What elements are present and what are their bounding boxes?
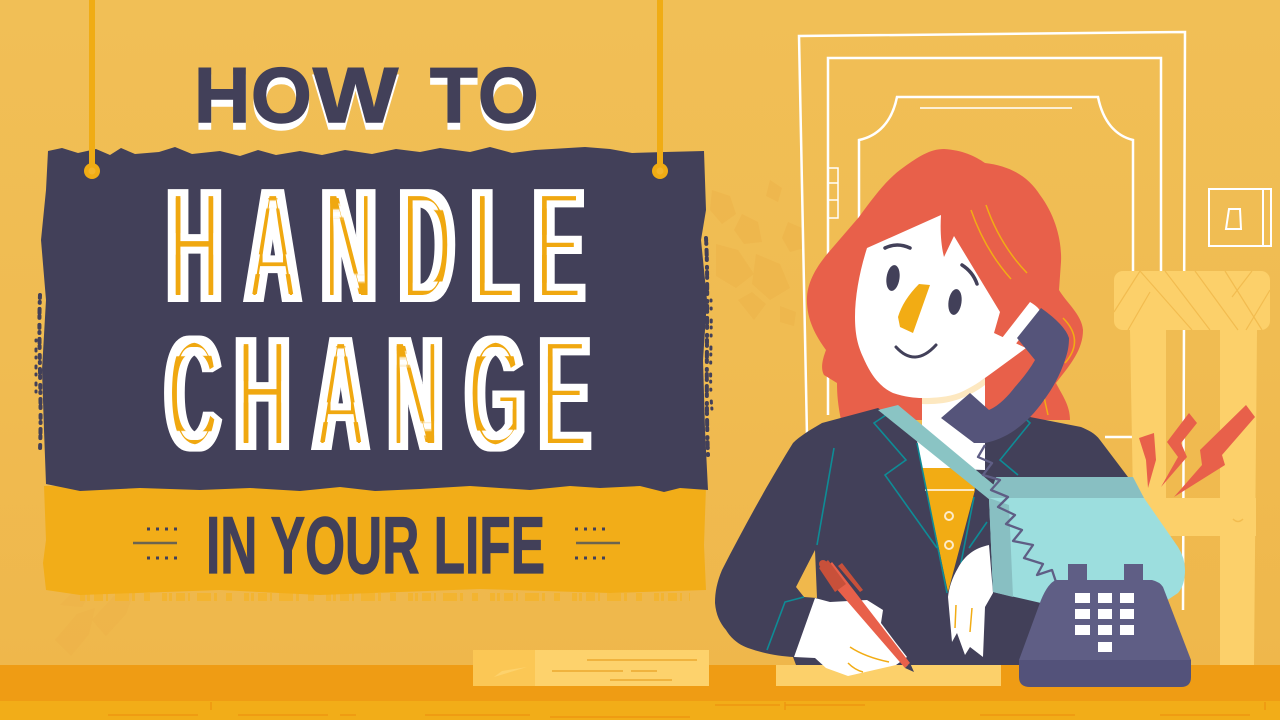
jacket: [715, 408, 1128, 665]
smile: [896, 345, 936, 357]
hair strands: [971, 205, 1075, 415]
title: HOW TO: O: [478, 51, 539, 139]
door frame: [799, 32, 1185, 610]
title: HOW TO: H: [194, 51, 250, 139]
writing hand: [794, 598, 907, 676]
armpit gap: [796, 550, 817, 598]
dark sign speckled edges: [36, 238, 712, 455]
eyes: [885, 264, 963, 316]
eyebrows: [885, 245, 977, 284]
hair: [807, 149, 1083, 420]
phone cord: [978, 445, 1056, 582]
nose: [898, 284, 930, 333]
pen: [819, 560, 914, 672]
yellow band speckle: [80, 593, 690, 601]
title: HOW TO: [194, 51, 539, 139]
neck: [922, 380, 985, 470]
shirt: [915, 430, 985, 470]
title: HANDLE: HANDLE: [168, 154, 583, 337]
phone handset: [941, 302, 1069, 443]
desk: [0, 665, 1280, 720]
person on the phone: [715, 149, 1185, 676]
light switch: [1209, 189, 1271, 246]
title: HOW TO: W: [313, 51, 398, 139]
jacket seams: [767, 412, 1030, 650]
title: HOW TO: O: [251, 51, 312, 139]
subtitle ornament left: [133, 529, 178, 558]
telephone keypad: [1075, 593, 1134, 652]
face: [855, 215, 1026, 398]
stool: [1114, 271, 1270, 665]
arm sling: [989, 498, 1185, 603]
ringing lightning bolts: [1139, 405, 1255, 497]
yellow sign band: [43, 486, 706, 595]
subtitle: IN YOUR LIFE: IN YOUR LIFE: [206, 501, 545, 591]
title: CHANGE: CHANGE: [166, 302, 589, 485]
arm sling strap: [878, 405, 1000, 500]
resting hand: [948, 545, 993, 657]
hanging strings: [89, 0, 663, 170]
title: HOW TO: T: [430, 51, 478, 139]
door hinges: [828, 168, 838, 218]
hanging rings: [84, 163, 668, 179]
dark sign board: [41, 147, 708, 492]
papers on desk: [473, 650, 1001, 686]
subtitle ornament right: [575, 529, 620, 558]
telephone base: [1019, 564, 1191, 687]
wall texture blotches: [55, 180, 804, 656]
shirt buttons: [945, 512, 953, 549]
